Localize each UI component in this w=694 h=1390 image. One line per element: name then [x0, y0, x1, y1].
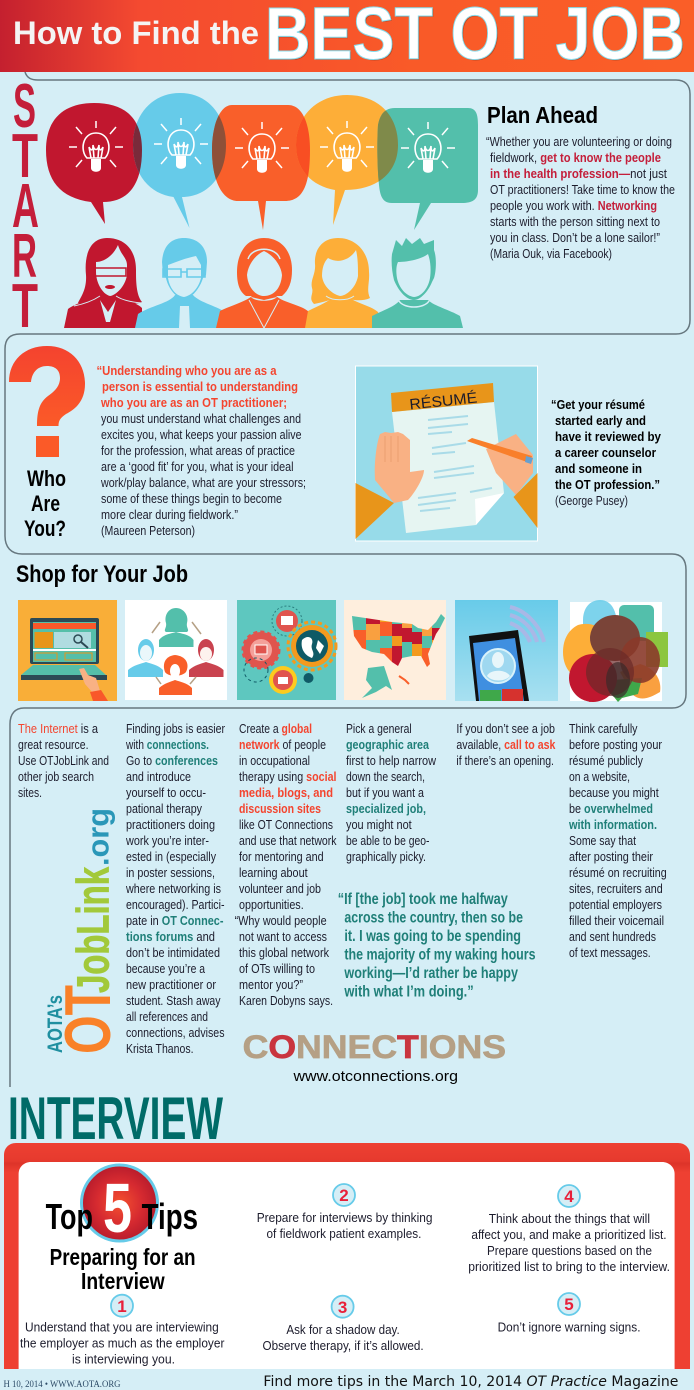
- illustration: resume: RÉSUMÉ: [409, 389, 478, 413]
- logo: OTJobLink.org: AOTA’s: [44, 995, 67, 1053]
- quote: George Pusey: have it reviewed by: [555, 429, 662, 444]
- column: connections: work you’re inter-: [125, 833, 209, 848]
- column: global network: discussion sites: [239, 801, 321, 816]
- column: posting your resume: and sent hundreds: [569, 929, 656, 944]
- people row: [64, 238, 463, 328]
- column: connections: new practitioner or: [126, 977, 217, 992]
- quote: Maureen Peterson: some of these things begin to become: [101, 491, 282, 506]
- column: the Internet: great resource.: [18, 737, 88, 752]
- heading: INTERVIEW: INTERVIEW: [8, 1085, 223, 1152]
- pull quote: halfway across the country: with what I’m doing.”: [344, 984, 474, 1001]
- column: connections: pational therapy: [126, 801, 202, 816]
- person: teal man: [372, 238, 463, 328]
- column: global network: learning about: [239, 865, 308, 880]
- column: connections: all references and: [126, 1009, 208, 1024]
- column: posting your resume: potential employers: [569, 897, 662, 912]
- right hand, sleeve and pencil: [467, 434, 538, 528]
- column: connections: yourself to occu-: [126, 785, 206, 800]
- column: global network: for mentoring and: [239, 849, 324, 864]
- quote: Maria Ouk: fieldwork, get to know the people: [490, 150, 661, 165]
- header banner: How to Find the: [13, 15, 259, 51]
- quote: Maureen Peterson: for the profession, what areas of practice: [101, 443, 295, 458]
- column: posting your resume: sites, recruiters and: [569, 881, 663, 896]
- pull quote: halfway across the country: across the country, then so be: [344, 910, 523, 927]
- quote: Maria Ouk: you in class. Don’t be a lone sailor!”: [490, 230, 660, 245]
- quote: Maria Ouk: people you work with. Networking: [490, 198, 657, 213]
- tip 4: affect you, and make a prioritized list.: [471, 1227, 667, 1242]
- column: connections: Finding jobs is easier: [126, 721, 226, 736]
- logo: Connections: www.otconnections.org: [292, 1068, 458, 1085]
- quote: George Pusey: and someone in: [555, 461, 642, 476]
- left hand and sleeve: [356, 432, 424, 539]
- person: red woman: [64, 238, 142, 328]
- tip 2: 2: [339, 1186, 349, 1205]
- START vertical heading: R: [12, 222, 37, 291]
- badge: number 5: 5: [103, 1169, 132, 1247]
- column: connections: don’t be intimidated: [126, 945, 220, 960]
- heading: Who Are You?: You?: [24, 516, 66, 541]
- column: connections: student. Stash away: [126, 993, 221, 1008]
- tile: gears and globe: [237, 600, 336, 700]
- logo: OTJobLink.org: JobLink: [68, 866, 118, 993]
- column: posting your resume: résumé on recruiting: [569, 865, 667, 880]
- column: the Internet: other job search: [18, 769, 94, 784]
- column: connections: ested in (especially: [126, 849, 216, 864]
- column: posting your resume: because you might: [569, 785, 659, 800]
- column: global network: media, blogs, and: [239, 785, 333, 800]
- footer: issue date and website: H 10, 2014 • WWW.AOTA.ORG: [4, 1379, 121, 1389]
- column: global network: mentor you?”: [239, 977, 303, 992]
- logo: OTJobLink.org: [44, 808, 124, 1054]
- pull quote: halfway across the country: “If [the job] took me halfway: [338, 891, 508, 908]
- column: geographic area: [346, 721, 437, 864]
- heading: Top Tips: Top: [46, 1196, 93, 1237]
- column: global network: opportunities.: [239, 897, 304, 912]
- heading: Top Tips: [46, 1196, 198, 1237]
- column: global network: like OT Connections: [239, 817, 333, 832]
- quote: Maureen Peterson: work/play balance, what are your stressors;: [100, 475, 306, 490]
- tip 4: 4: [564, 1187, 574, 1206]
- column: connections: connections, advises: [126, 1025, 225, 1040]
- pull quote: halfway across the country: working—I’d rather be happy: [344, 965, 518, 982]
- quote: Maureen Peterson: who you are as an OT practitioner;: [100, 395, 287, 410]
- heading: Preparing for an Interview: Preparing for an: [50, 1244, 196, 1270]
- column: geographic area: Pick a general: [346, 721, 412, 736]
- heading: Preparing for an Interview: [50, 1244, 196, 1294]
- heading: Preparing for an Interview: Interview: [81, 1268, 165, 1294]
- heading: Top Tips: Tips: [142, 1196, 198, 1237]
- column: geographic area: first to help narrow: [346, 753, 437, 768]
- heading: Shop for Your Job: Shop for Your Job: [16, 561, 188, 588]
- column: connections: tions forums and: [126, 929, 215, 944]
- column: connections: [125, 721, 226, 1056]
- pull quote: halfway across the country: [338, 891, 536, 1001]
- column: connections: with connections.: [125, 737, 209, 752]
- quote: Maureen Peterson: are a ‘good fit’ for you, what is your ideal: [101, 459, 294, 474]
- column: the Internet: Use OTJobLink and: [18, 753, 109, 768]
- speech bubbles with light bulbs: [46, 93, 478, 230]
- person: blue man: [135, 238, 228, 328]
- column: connections: and introduce: [126, 769, 191, 784]
- pull quote: halfway across the country: the majority of my waking hours: [344, 947, 536, 964]
- column: connections: practitioners doing: [126, 817, 215, 832]
- tip 2: [257, 1184, 432, 1241]
- quote: George Pusey: the OT profession.”: [555, 477, 660, 492]
- tile: smartphone: [455, 600, 558, 701]
- column: posting your resume: [568, 721, 667, 960]
- column: posting your resume: be overwhelmed: [569, 801, 653, 816]
- START vertical heading: T: [12, 122, 38, 191]
- column: geographic area: but if you want a: [346, 785, 425, 800]
- panel outlines: [5, 72, 690, 1087]
- column: the Internet: [18, 721, 109, 800]
- tip 1: the employer as much as the employer: [20, 1336, 225, 1351]
- logo: Connections: [243, 1029, 506, 1085]
- column: global network: therapy using social: [239, 769, 336, 784]
- tip 1: [20, 1295, 225, 1367]
- column: global network: Create a global: [239, 721, 312, 736]
- START vertical heading: T: [12, 272, 38, 341]
- logo: OTJobLink.org: .org: [80, 808, 116, 866]
- heading: Plan Ahead: Plan Ahead: [487, 102, 598, 128]
- column: posting your resume: Think carefully: [569, 721, 638, 736]
- tip 4: Prepare questions based on the: [487, 1243, 652, 1258]
- column: global network: “Why would people: [235, 913, 327, 928]
- tip 5: [498, 1293, 640, 1335]
- column: posting your resume: Some say that: [569, 833, 636, 848]
- tip 4: prioritized list to bring to the interview.: [468, 1259, 670, 1274]
- tip 4: Think about the things that will: [489, 1211, 650, 1226]
- tip 1: is interviewing you.: [72, 1352, 175, 1367]
- column: connections: Go to conferences: [126, 753, 218, 768]
- tile: laptop: [18, 600, 117, 701]
- quote: George Pusey: started early and: [555, 413, 646, 428]
- column: geographic area: be able to be geo-: [346, 833, 429, 848]
- quote: Maria Ouk: in the health profession—not just: [490, 166, 667, 181]
- tile: colored speech bubbles: [563, 600, 668, 702]
- column: posting your resume: after posting their: [569, 849, 654, 864]
- pull quote: halfway across the country: it. I was going to be spending: [344, 928, 521, 945]
- panel: top 5 tips: [4, 1143, 690, 1369]
- column: posting your resume: of text messages.: [569, 945, 651, 960]
- quote: George Pusey: a career counselor: [555, 445, 656, 460]
- column: connections: where networking is: [125, 881, 221, 896]
- person: yellow woman: [305, 238, 384, 328]
- column: geographic area: you might not: [346, 817, 412, 832]
- heading: Who Are You?: Are: [31, 491, 60, 516]
- quote: George Pusey: [551, 397, 662, 508]
- badge: number 5: [82, 1165, 158, 1247]
- quote: Maureen Peterson: “Understanding who you are as a: [96, 363, 277, 378]
- column: global network: of OTs willing to: [239, 961, 315, 976]
- header banner: [0, 0, 694, 76]
- illustration: resume: [356, 366, 538, 541]
- column: call to ask: If you don’t see a job: [456, 721, 555, 736]
- column: connections: in poster sessions,: [126, 865, 215, 880]
- tile: US map: [344, 600, 446, 700]
- icon: question mark: [9, 346, 85, 457]
- quote: Maureen Peterson: [96, 363, 306, 538]
- column: posting your resume: résumé publicly: [569, 753, 643, 768]
- column: global network: volunteer and job: [239, 881, 321, 896]
- column: global network: [235, 721, 337, 1008]
- column: global network: this global network: [239, 945, 329, 960]
- tip 5: 5: [564, 1295, 574, 1314]
- heading: Who Are You?: Who: [27, 466, 66, 491]
- tip 1: Understand that you are interviewing: [25, 1320, 219, 1335]
- column: posting your resume: on a website,: [569, 769, 630, 784]
- footer: find more tips: Find more tips in the March 10, 2014 OT Practice Magazine: [263, 1374, 678, 1390]
- column: call to ask: if there’s an opening.: [456, 753, 554, 768]
- quote: Maureen Peterson: (Maureen Peterson): [101, 523, 195, 538]
- quote: Maureen Peterson: you must understand what challenges and: [101, 411, 301, 426]
- tip 3: 3: [338, 1298, 347, 1317]
- tip 3: [262, 1296, 424, 1353]
- tip 1: 1: [117, 1297, 127, 1316]
- column: posting your resume: with information.: [568, 817, 657, 832]
- quote: Maureen Peterson: excites you, what keeps your passion alive: [101, 427, 302, 442]
- column: connections: encouraged). Partici-: [126, 897, 224, 912]
- column: call to ask: [456, 721, 556, 768]
- quote: Maria Ouk: [486, 134, 675, 261]
- tip 3: Observe therapy, if it’s allowed.: [262, 1338, 424, 1353]
- column: posting your resume: filled their voicemail: [569, 913, 664, 928]
- column: the Internet: The Internet is a: [18, 721, 99, 736]
- column: geographic area: graphically picky.: [346, 849, 426, 864]
- logo: Connections: CONNEC TIONS: [243, 1029, 506, 1065]
- column: geographic area: geographic area: [346, 737, 430, 752]
- quote: Maureen Peterson: person is essential to understanding: [102, 379, 298, 394]
- quote: Maureen Peterson: more clear during fieldwork.”: [101, 507, 238, 522]
- quote: Maria Ouk: starts with the person sitting next to: [490, 214, 660, 229]
- column: call to ask: available, call to ask: [456, 737, 556, 752]
- quote: George Pusey: “Get your résumé: [551, 397, 645, 412]
- START vertical heading: S: [13, 72, 36, 141]
- tip 2: Prepare for interviews by thinking: [257, 1210, 432, 1225]
- column: global network: not want to access: [239, 929, 327, 944]
- column: global network: Karen Dobyns says.: [239, 993, 333, 1008]
- column: geographic area: specialized job,: [346, 801, 426, 816]
- tile: people network: [125, 600, 227, 700]
- column: the Internet: sites.: [18, 785, 42, 800]
- person: orange woman: [216, 238, 312, 328]
- tip 3: Ask for a shadow day.: [286, 1322, 400, 1337]
- column: connections: Krista Thanos.: [126, 1041, 194, 1056]
- column: global network: and use that network: [239, 833, 337, 848]
- column: connections: because you’re a: [126, 961, 206, 976]
- START vertical heading: A: [12, 172, 39, 241]
- column: global network: network of people: [239, 737, 326, 752]
- heading: Who Are You?: [24, 466, 66, 541]
- quote: George Pusey: (George Pusey): [555, 493, 628, 508]
- START vertical heading: [12, 72, 39, 341]
- tip 5: Don’t ignore warning signs.: [498, 1320, 640, 1335]
- column: geographic area: down the search,: [346, 769, 425, 784]
- column: global network: in occupational: [239, 753, 310, 768]
- logo: OTJobLink.org: OT: [51, 985, 124, 1054]
- column: posting your resume: before posting your: [569, 737, 663, 752]
- tip 4: [468, 1185, 670, 1274]
- column: connections: pate in OT Connec-: [126, 913, 224, 928]
- quote: Maria Ouk: (Maria Ouk, via Facebook): [490, 246, 612, 261]
- tip 2: of fieldwork patient examples.: [266, 1226, 421, 1241]
